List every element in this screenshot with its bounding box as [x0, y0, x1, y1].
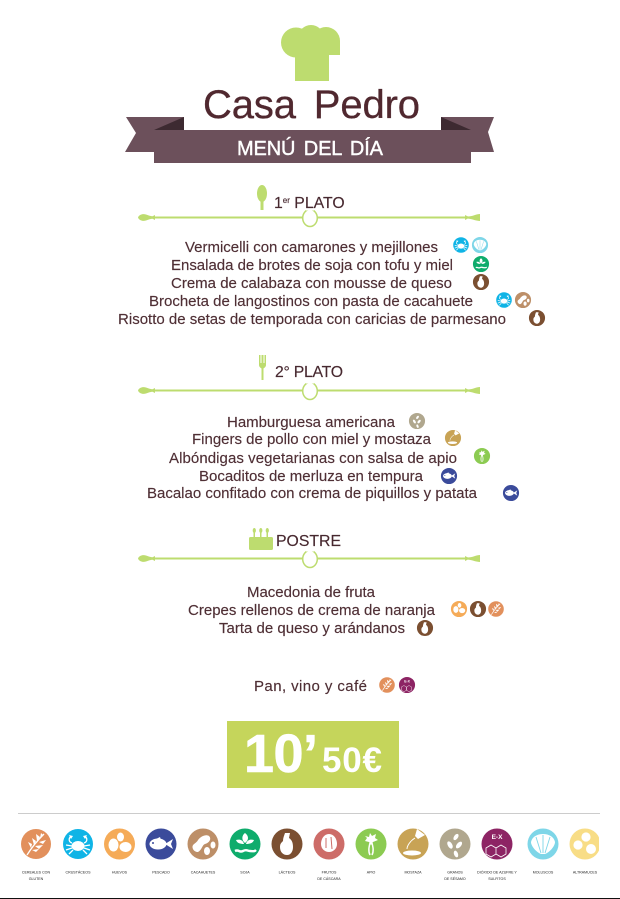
- legend item: cacahuetes: CACAHUETES: [191, 870, 216, 874]
- list: segundos platos: Fingers de pollo con miel y mostaza: [192, 431, 432, 448]
- price: 10’: [244, 724, 318, 784]
- heading: 1er plato: 1: [274, 195, 283, 212]
- legend item: apio: [356, 828, 386, 874]
- legend item: crustáceos: CRUSTÁCEOS: [66, 870, 91, 874]
- list: primeros platos: [118, 239, 506, 328]
- legend divider: [18, 812, 600, 814]
- legend item: pescado: PESCADO: [152, 870, 170, 874]
- legend item: frutos secos: FRUTOS: [322, 870, 337, 874]
- list: segundos platos: Bacalao confitado con crema de piquillos y patata: [147, 485, 478, 502]
- legend item: huevos: [104, 828, 135, 874]
- legend item: altramuces: [570, 828, 600, 874]
- legend item: moluscos: [528, 828, 558, 874]
- list: primeros platos: Brocheta de langostinos con pasta de cacahuete: [149, 293, 473, 310]
- legend item: cacahuetes: [188, 828, 218, 874]
- list: segundos platos: Bocaditos de merluza en tempura: [199, 468, 424, 485]
- heading: postre: POSTRE: [276, 533, 341, 550]
- legend item: lácteos: LÁCTEOS: [279, 870, 296, 874]
- title: Casa Pedro: [203, 83, 420, 127]
- legend item: soja: SOJA: [240, 870, 250, 874]
- legend item: sésamo: GRANOS: [447, 870, 463, 874]
- legend item: pescado: [146, 828, 176, 874]
- divider 1: [138, 208, 480, 226]
- legend item: huevos: HUEVOS: [112, 870, 128, 874]
- list: primeros platos: Vermicelli con camarones y mejillones: [185, 239, 438, 256]
- list: postres: Crepes rellenos de crema de naranja: [188, 602, 436, 619]
- heading: 2o plato: 2° PLATO: [275, 364, 343, 381]
- bottom edge line: [0, 898, 620, 899]
- legend item: moluscos: MOLUSCOS: [533, 870, 554, 874]
- banner: menú del día: [125, 117, 494, 163]
- banner: menú del día: MENÚ DEL DÍA: [237, 137, 384, 160]
- list: postres: [188, 584, 436, 637]
- divider 3: [138, 550, 480, 568]
- allergen icons: segundos platos: [409, 413, 519, 501]
- legend item: gluten: GLUTEN: [29, 877, 44, 881]
- list: primeros platos: Risotto de setas de temporada con caricias de parmesano: [118, 311, 506, 328]
- legend item: gluten: [21, 829, 51, 881]
- legend item: mostaza: [398, 828, 428, 874]
- heading: 1er plato: er: [283, 196, 290, 205]
- allergen icons: primeros platos: [453, 237, 545, 326]
- legend item: sulfitos: SULFITOS: [488, 877, 506, 881]
- heading: 1er plato: PLATO: [290, 195, 345, 212]
- legend item: sésamo: [440, 828, 470, 881]
- legend item: sulfitos: DIÓXIDO DE AZUFRE Y: [477, 870, 517, 874]
- list: segundos platos: Albóndigas vegetarianas con salsa de apio: [169, 450, 457, 467]
- legend: allergens: [21, 825, 620, 885]
- list: postres: Tarta de queso y arándanos: [219, 620, 405, 637]
- divider 2: [138, 382, 480, 400]
- allergen icons: postres: [417, 601, 504, 636]
- legend item: apio: APIO: [367, 870, 375, 874]
- allergen icons: pan, vino y café: [379, 677, 415, 693]
- icon: fork: [259, 355, 266, 380]
- legend item: altramuces: ALTRAMUCES: [573, 870, 598, 874]
- legend item: gluten: CEREALES CON: [22, 870, 50, 874]
- price: [227, 721, 399, 788]
- list: segundos platos: [147, 414, 478, 502]
- list: primeros platos: Ensalada de brotes de soja con tofu y miel: [171, 257, 453, 274]
- legend item: sésamo: DE SÉSAMO: [444, 876, 466, 881]
- legend item: mostaza: MOSTAZA: [404, 870, 422, 874]
- price: 50€: [322, 741, 382, 780]
- legend item: frutos secos: [314, 828, 344, 881]
- list: primeros platos: Crema de calabaza con mousse de queso: [171, 275, 452, 292]
- icon: chef hat: [281, 25, 340, 81]
- heading: 2o plato: [259, 355, 343, 381]
- heading: 1er plato: [257, 185, 345, 212]
- legend item: crustáceos: [63, 829, 93, 874]
- heading: postre: [249, 528, 341, 550]
- legend item: soja: [230, 828, 260, 874]
- icon: cake: [249, 528, 273, 550]
- text: pan, vino y café: Pan, vino y café: [254, 678, 367, 695]
- list: postres: Macedonia de fruta: [247, 584, 376, 601]
- legend item: frutos secos: DE CÁSCARA: [317, 877, 341, 881]
- legend item: lácteos: [272, 828, 302, 874]
- legend item: sulfitos: [477, 828, 517, 881]
- icon: spoon: [257, 185, 267, 210]
- list: segundos platos: Hamburguesa americana: [227, 414, 396, 431]
